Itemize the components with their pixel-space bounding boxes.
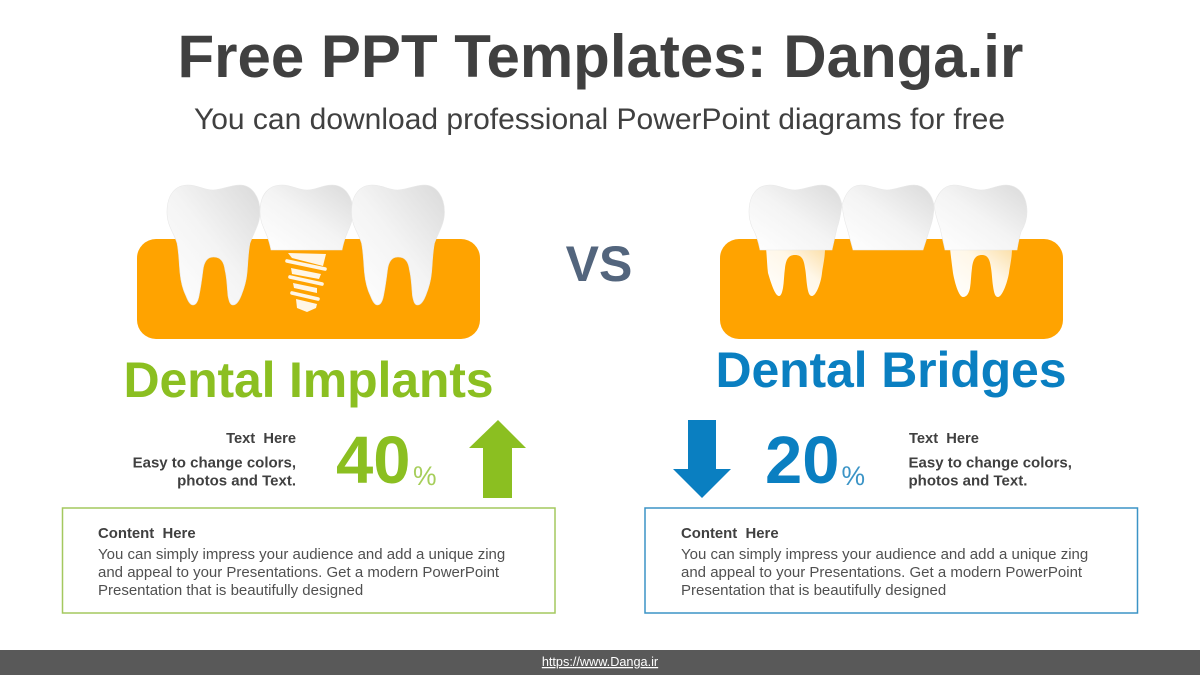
stat: 20 percent: 20 xyxy=(765,423,840,498)
content heading: Content Here xyxy=(98,526,196,542)
content body: You can simply impress your audience and add a unique zing xyxy=(98,546,505,563)
tooth: left natural xyxy=(167,185,260,305)
text block: implants note: Easy to change colors, xyxy=(133,454,296,472)
arrow: up xyxy=(469,420,526,498)
illustration: dental bridge xyxy=(720,185,1063,339)
content heading: Content Here xyxy=(681,526,779,542)
stat: 40 percent: % xyxy=(413,461,437,491)
gum: bridge side xyxy=(720,239,1063,339)
content body xyxy=(98,546,505,599)
content body: Presentation that is beautifully designed xyxy=(98,582,363,599)
stat: 20 percent: % xyxy=(842,461,865,491)
text block: implants note: photos and Text. xyxy=(177,472,296,490)
title: Free PPT Templates: Danga.ir xyxy=(178,23,1023,90)
text block: bridges note: photos and Text. xyxy=(908,472,1027,490)
gum: implant side xyxy=(137,239,480,339)
content body: and appeal to your Presentations. Get a modern PowerPoint xyxy=(98,564,500,581)
footer bar xyxy=(0,650,1200,675)
heading: dental implants: Dental Implants xyxy=(124,352,494,408)
text block: implants note: Text Here xyxy=(226,431,296,447)
content body: and appeal to your Presentations. Get a modern PowerPoint xyxy=(681,564,1083,581)
text block: bridges note xyxy=(908,431,1072,490)
vs label: VS xyxy=(566,236,632,292)
arrow: down xyxy=(673,420,731,498)
stat: 40 percent: 40 xyxy=(336,423,411,498)
text block: bridges note: Text Here xyxy=(909,431,979,447)
panel: bridges content xyxy=(645,508,1138,613)
root: left abutment xyxy=(766,248,825,296)
tooth: implant crown xyxy=(260,185,353,250)
bridge crown: right xyxy=(934,185,1027,250)
bridge crown: pontic xyxy=(842,185,934,250)
bridge crown: left xyxy=(749,185,842,250)
text block: bridges note: Easy to change colors, xyxy=(908,454,1072,472)
subtitle: You can download professional PowerPoint diagrams for free xyxy=(194,103,1005,136)
heading: dental bridges: Dental Bridges xyxy=(716,342,1066,398)
tooth: right natural xyxy=(352,185,444,305)
content body: You can simply impress your audience and add a unique zing xyxy=(681,546,1088,563)
text block: implants note xyxy=(133,431,296,490)
panel: implants content xyxy=(62,508,555,613)
root: right abutment xyxy=(950,248,1012,297)
content body: Presentation that is beautifully designed xyxy=(681,582,946,599)
implant screw xyxy=(287,253,326,312)
illustration: dental implant xyxy=(137,185,480,339)
content body xyxy=(681,546,1088,599)
footer link: https://www.Danga.ir xyxy=(542,655,659,669)
